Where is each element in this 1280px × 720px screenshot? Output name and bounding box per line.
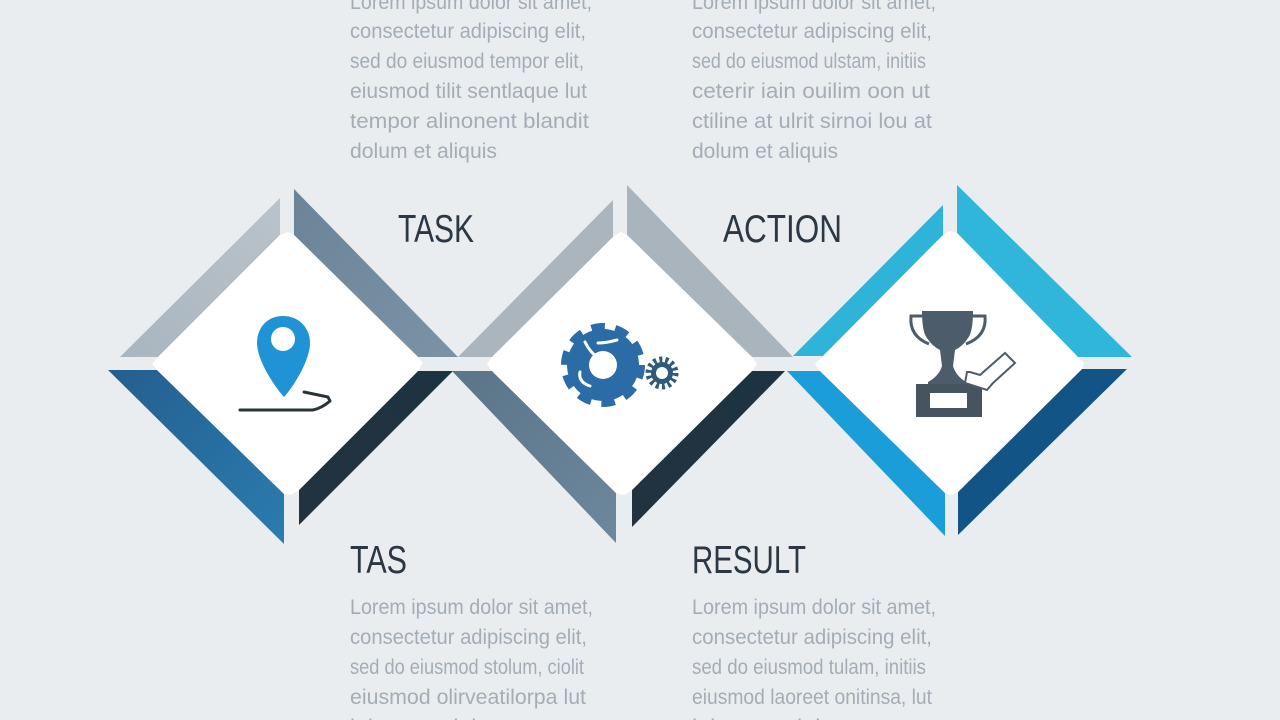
- text block: top right: [692, 0, 936, 163]
- icon: gears: [565, 327, 676, 403]
- band: top left: [120, 198, 280, 357]
- diamond 1: task: [108, 189, 458, 544]
- heading: RESULT: RESULT: [692, 539, 806, 582]
- band: bottom left: [452, 371, 616, 543]
- icon: map pin with path: [240, 316, 330, 410]
- band: bottom right: [299, 371, 453, 525]
- band: top right: [957, 185, 1132, 357]
- text block: bottom right: eiusmod laoreet onitinsa, lut: [692, 686, 932, 709]
- text block: top left: tempor alinonent blandit: [350, 110, 589, 133]
- diamond 2: action: [452, 185, 793, 543]
- white centre: [815, 231, 1084, 495]
- text block: top left: consectetur adipiscing elit,: [350, 20, 586, 43]
- text block: bottom left: consectetur adipiscing elit,: [350, 626, 587, 649]
- diamond 3: result: [787, 185, 1132, 536]
- band: bottom left: [787, 371, 945, 536]
- text block: top right: consectetur adipiscing elit,: [692, 20, 932, 43]
- text block: top right: ctiline at ulrit sirnoi lou at: [692, 110, 932, 133]
- text block: bottom right: sed do eiusmod tulam, initiis: [692, 656, 926, 679]
- white centre: [487, 232, 757, 495]
- band: bottom right: [632, 371, 785, 527]
- band: bottom left: [108, 370, 284, 544]
- text block: bottom left: [350, 596, 593, 720]
- text block: top left: [350, 0, 592, 163]
- heading: ACTION: ACTION: [723, 208, 842, 251]
- heading: TASK: TASK: [398, 208, 474, 251]
- band: bottom right: [958, 369, 1127, 535]
- text block: top right: sed do eiusmod ulstam, initiis: [692, 50, 926, 73]
- white centre: [152, 232, 423, 495]
- text block: top right: dolum et aliquis: [692, 140, 838, 163]
- heading: TAS: TAS: [350, 539, 407, 582]
- band: top right: [294, 189, 458, 357]
- band: top right: [627, 185, 793, 357]
- text block: top right: ceterir iain ouilim oon ut: [692, 80, 930, 103]
- text block: top left: dolum et aliquis: [350, 140, 497, 163]
- text block: top left: sed do eiusmod tempor elit,: [350, 50, 584, 73]
- text block: bottom right: [692, 596, 936, 720]
- text block: bottom right: consectetur adipiscing elit,: [692, 626, 932, 649]
- text block: bottom left: eiusmod olirveatilorpa lut: [350, 686, 586, 709]
- text block: top left: eiusmod tilit sentlaque lut: [350, 80, 587, 103]
- text block: bottom left: Lorem ipsum dolor sit amet,: [350, 596, 593, 619]
- icon: trophy with pencil: [911, 311, 1015, 417]
- text block: bottom left: sed do eiusmod stolum, ciolit: [350, 656, 584, 679]
- band: top left: [458, 200, 613, 357]
- band: top left: [793, 205, 943, 356]
- text block: bottom right: Lorem ipsum dolor sit amet,: [692, 596, 936, 619]
